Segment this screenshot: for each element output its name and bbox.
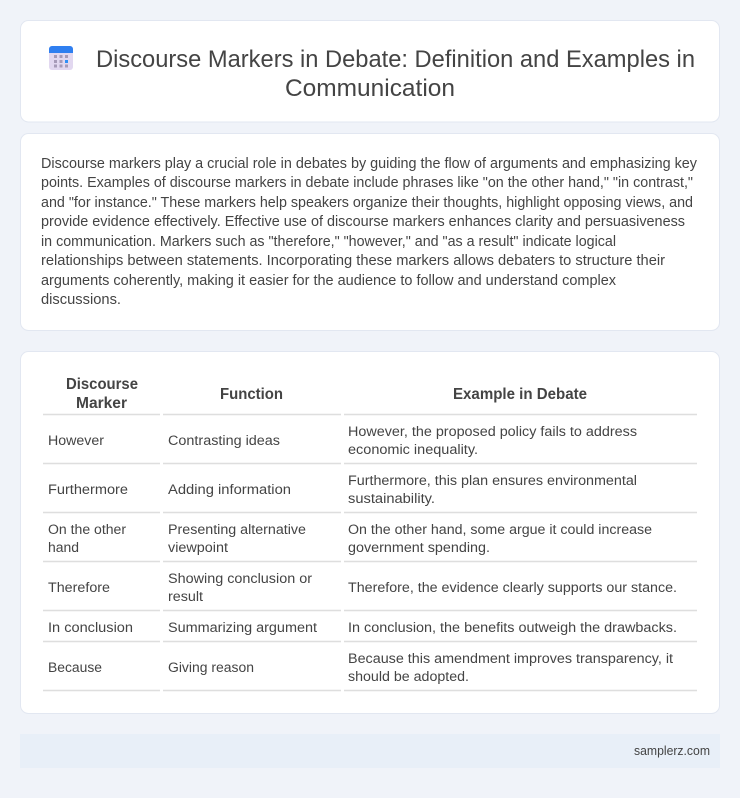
icon: calendar [49, 46, 73, 70]
footer bar [20, 734, 720, 768]
table row: Therefore [48, 571, 677, 605]
table header [66, 376, 587, 412]
title: Discourse Markers in Debate: Definition and Examples in [96, 46, 695, 73]
text block: introduction paragraph: arguments coherently, making it easier for the audience to follow and understand complex [41, 273, 617, 289]
table row: Therefore: Showing conclusion or [168, 571, 312, 587]
title: Communication [285, 75, 455, 102]
text block: introduction paragraph: relationships between statements. Incorporating these markers allows debaters to structure their [41, 253, 665, 269]
text block: introduction paragraph: in communication. Markers such as "therefore," "however," and "as a result" indicate logical [41, 234, 616, 250]
table row: On the other hand [48, 522, 652, 556]
table header: Discourse [66, 376, 138, 393]
text block: introduction paragraph: points. Examples of discourse markers in debate include phrases like "on the other hand," "in contrast," [41, 175, 693, 191]
table header: Function [220, 386, 283, 403]
table row: However: However, the proposed policy fails to address [348, 424, 637, 440]
table row: On the other hand: On the other hand, some argue it could increase [348, 522, 652, 538]
table row: However: economic inequality. [348, 442, 478, 458]
table row: Furthermore: Furthermore [48, 482, 128, 498]
text block: introduction paragraph [41, 156, 698, 308]
table row: Therefore: Therefore, the evidence clearly supports our stance. [348, 580, 677, 596]
table row: On the other hand: Presenting alternative [168, 522, 306, 538]
text block: introduction paragraph: discussions. [41, 292, 121, 308]
table row: Because: Giving reason [168, 660, 254, 676]
table row: On the other hand: On the other [48, 522, 126, 538]
panel: introduction [20, 134, 720, 330]
table row: Because: Because this amendment improves transparency, it [348, 651, 673, 667]
table row: Furthermore: Furthermore, this plan ensures environmental [348, 473, 637, 489]
table row: In conclusion: In conclusion [48, 620, 133, 636]
table row: Furthermore [48, 473, 637, 507]
table row: However [48, 424, 637, 458]
table row: On the other hand: government spending. [348, 540, 490, 556]
table row: On the other hand: viewpoint [168, 540, 228, 556]
table row: Because [48, 651, 673, 685]
title [96, 46, 695, 102]
table row: In conclusion [48, 620, 677, 636]
table header: Marker [76, 395, 127, 412]
panel: discourse markers table [20, 352, 720, 714]
table header: Example in Debate [453, 386, 587, 403]
table row: In conclusion: Summarizing argument [168, 620, 317, 636]
panel: title header [20, 20, 720, 122]
table row: In conclusion: In conclusion, the benefits outweigh the drawbacks. [348, 620, 677, 636]
table row: However: Contrasting ideas [168, 433, 280, 449]
text block: introduction paragraph: provide evidence effectively. Effective use of discourse markers enhances clarity and persuasiveness [41, 214, 685, 230]
text block: introduction paragraph: and "for instance." These markers help speakers organize their thoughts, highlight opposing views, and [41, 195, 693, 211]
table row: Therefore: Therefore [48, 580, 110, 596]
table row: Furthermore: Adding information [168, 482, 291, 498]
footer bar: samplerz.com [634, 744, 710, 758]
table row: Therefore: result [168, 589, 203, 605]
table row: Furthermore: sustainability. [348, 491, 435, 507]
text block: introduction paragraph: Discourse markers play a crucial role in debates by guiding the flow of arguments and emphasizing key [41, 156, 698, 172]
table row: However: However [48, 433, 104, 449]
table row: Because: should be adopted. [348, 669, 469, 685]
table row: Because: Because [48, 660, 102, 676]
table row: On the other hand: hand [48, 540, 79, 556]
